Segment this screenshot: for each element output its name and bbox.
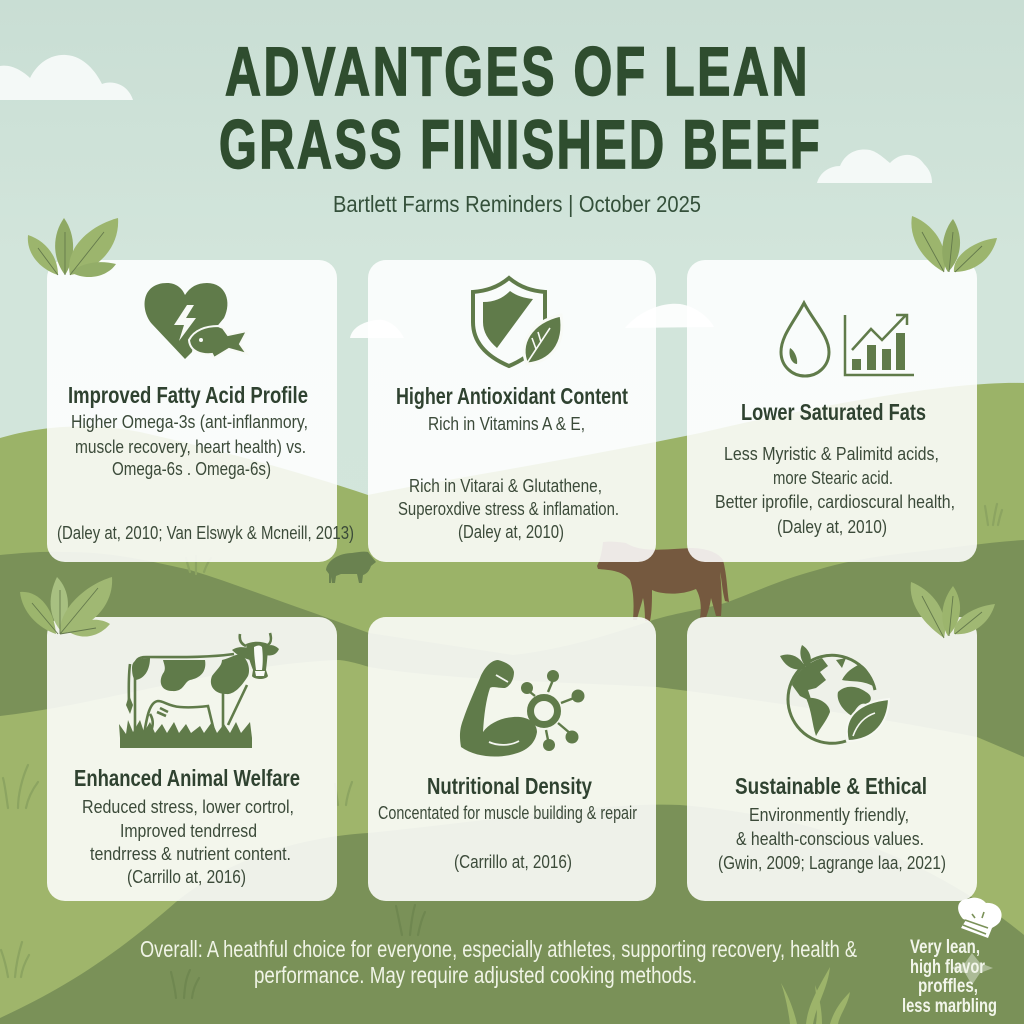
icon: shield with leaf [473, 278, 562, 366]
body text: Improved tendrresd [120, 820, 257, 841]
chef note: high flavor [910, 957, 985, 978]
grass tufts [1, 504, 1002, 1024]
body text: (Gwin, 2009; Lagrange laa, 2021) [718, 852, 946, 873]
chef note: proffles, [918, 976, 978, 997]
body text: Concentated for muscle building & repair [378, 802, 637, 823]
heading: Lower Saturated Fats [741, 399, 926, 425]
panel: sustainable and ethical [687, 617, 977, 901]
body text: muscle recovery, heart health) vs. [75, 436, 306, 457]
chef note: less marbling [902, 996, 997, 1017]
body text: Rich in Vitarai & Glutathene, [409, 475, 602, 496]
brown cow in distance [597, 542, 729, 621]
cloud: behind centre card left [350, 320, 404, 338]
body text: (Carrillo at, 2016) [454, 851, 572, 872]
heading: Higher Antioxidant Content [396, 383, 628, 409]
icon: leaves top left [28, 218, 118, 277]
body text [378, 802, 637, 872]
body text: Rich in Vitamins A & E, [428, 413, 585, 434]
heading: Sustainable & Ethical [735, 773, 927, 799]
icon: flexed arm and molecule [460, 660, 584, 756]
icon: oil drop and bar chart [781, 303, 914, 376]
chef note: Very lean, [910, 937, 980, 958]
cloud: right of title [817, 150, 932, 183]
panel: lower saturated fats [687, 260, 977, 562]
body text: Higher Omega-3s (ant-inflanmory, [71, 411, 308, 432]
icon: globe with leaves [780, 645, 889, 743]
icon: leaves middle left [20, 577, 112, 637]
body text: Environmently friendly, [749, 804, 909, 825]
body text: Less Myristic & Palimitd acids, [724, 443, 939, 464]
panel: higher antioxidant content [368, 260, 656, 562]
cloud: behind centre card right [625, 304, 714, 328]
panel: improved fatty acid profile [47, 260, 354, 562]
body text [57, 411, 354, 543]
panel: enhanced animal welfare [47, 617, 337, 901]
body text: Omega-6s . Omega-6s) [112, 458, 271, 479]
body text: (Daley at, 2010) [458, 521, 564, 542]
body text [82, 796, 294, 887]
decorative diamond sparkle [950, 953, 993, 985]
heading: Enhanced Animal Welfare [74, 765, 300, 791]
body text: Superoxdive stress & inflamation. [398, 498, 619, 519]
icon: dairy cow on grass [119, 633, 279, 748]
title: ADVANTGES OF LEAN [225, 33, 810, 110]
body text: (Daley at, 2010) [777, 516, 887, 537]
body text: Better iprofile, cardioscural health, [715, 491, 955, 512]
icon: heart and fish [145, 283, 247, 359]
body text [718, 804, 946, 873]
body text [715, 443, 955, 537]
icon: leaves middle right [911, 582, 995, 638]
body text: tendrress & nutrient content. [90, 843, 291, 864]
title [219, 33, 822, 183]
footer summary [140, 936, 857, 988]
small distant cow [326, 552, 376, 583]
body text: (Carrillo at, 2016) [127, 866, 246, 887]
body text: & health-conscious values. [736, 828, 924, 849]
footer summary: Overall: A heathful choice for everyone, especially athletes, supporting recovery, health & [140, 936, 857, 962]
icon: leaves top right [911, 216, 997, 272]
heading: Improved Fatty Acid Profile [68, 382, 308, 408]
body text [398, 413, 619, 542]
cloud: upper left [0, 55, 133, 100]
footer summary: performance. May require adjusted cooking methods. [254, 962, 697, 988]
body text: Reduced stress, lower cortrol, [82, 796, 294, 817]
body text: (Daley at, 2010; Van Elswyk & Mcneill, 2013) [57, 522, 354, 543]
body text: more Stearic acid. [773, 467, 893, 488]
panel: nutritional density [368, 617, 656, 901]
heading: Nutritional Density [427, 773, 592, 799]
icon: chef hat [958, 898, 1002, 938]
subtitle: Bartlett Farms Reminders | October 2025 [333, 191, 701, 217]
chef note [902, 937, 997, 1017]
